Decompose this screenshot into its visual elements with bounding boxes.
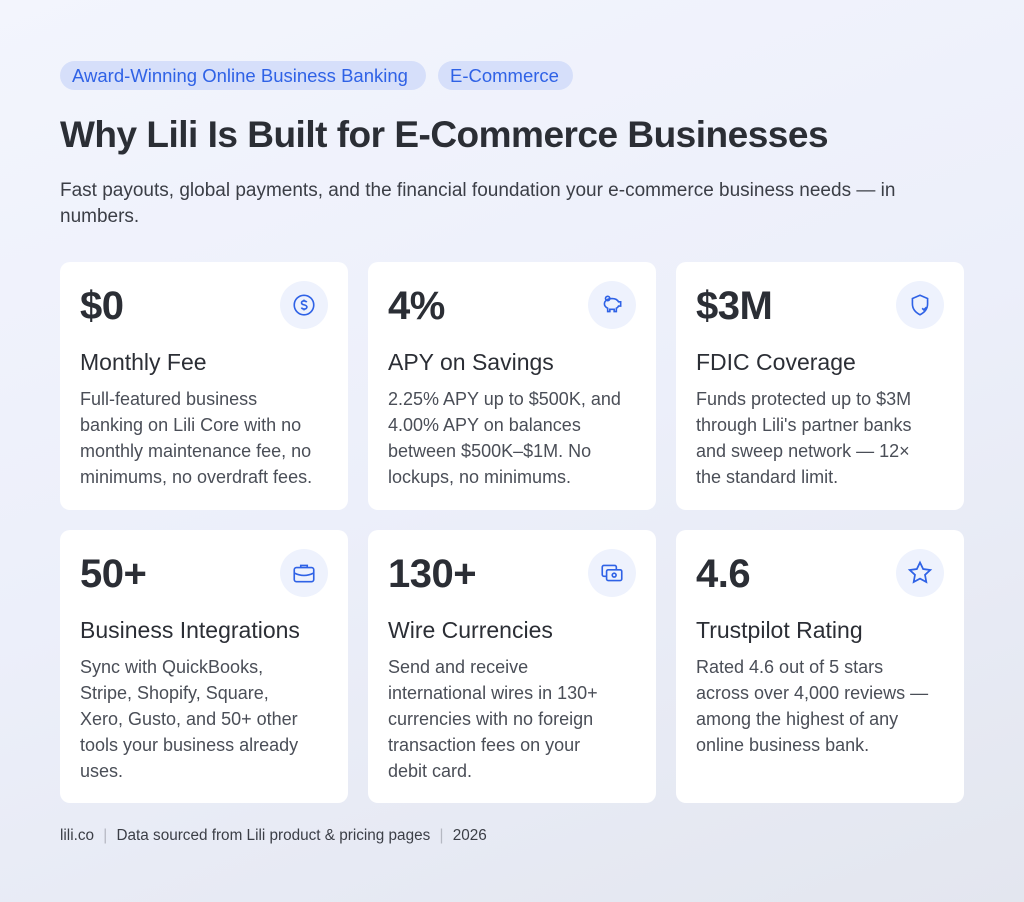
- card: FDIC: Funds protected up to $3M: [696, 389, 911, 409]
- card: currencies: 130+: [388, 552, 476, 596]
- card: FDIC: the standard limit.: [696, 467, 838, 487]
- pill: award: [60, 61, 426, 90]
- icon: briefcase: [280, 549, 328, 597]
- card: APY: [368, 262, 656, 510]
- icon: cash: [588, 549, 636, 597]
- card: APY: lockups, no minimums.: [388, 467, 571, 487]
- card: trustpilot: across over 4,000 reviews —: [696, 683, 928, 703]
- pill: award: Award-Winning Online Business Banking: [72, 65, 408, 86]
- card: integrations: [60, 530, 348, 803]
- card: currencies: [368, 530, 656, 803]
- subtitle: Fast payouts, global payments, and the financial foundation your e-commerce business needs — in: [60, 180, 895, 201]
- card: monthly fee: banking on Lili Core with no: [80, 415, 301, 435]
- card: integrations: uses.: [80, 761, 123, 781]
- pill: e-commerce: E-Commerce: [450, 65, 559, 86]
- card: FDIC: [676, 262, 964, 510]
- icon: piggy bank: [588, 281, 636, 329]
- card: monthly fee: Monthly Fee: [80, 349, 207, 375]
- card: FDIC: through Lili's partner banks: [696, 415, 912, 435]
- card: trustpilot: online business bank.: [696, 735, 869, 755]
- card: trustpilot: Rated 4.6 out of 5 stars: [696, 657, 883, 677]
- icon: dollar: [280, 281, 328, 329]
- card: APY: 2.25% APY up to $500K, and: [388, 389, 621, 409]
- footer: lili.co | Data sourced from Lili product & pricing pages | 2026: [60, 827, 487, 844]
- subtitle: [60, 180, 895, 227]
- icon: shield: [896, 281, 944, 329]
- card: APY: 4.00% APY on balances: [388, 415, 581, 435]
- card: FDIC: FDIC Coverage: [696, 349, 856, 375]
- card: monthly fee: Full-featured business: [80, 389, 257, 409]
- card: trustpilot: Trustpilot Rating: [696, 617, 863, 643]
- card: APY: 4%: [388, 284, 445, 328]
- card: currencies: international wires in 130+: [388, 683, 598, 703]
- card: monthly fee: $0: [80, 284, 124, 328]
- card: monthly fee: [60, 262, 348, 510]
- card: APY: between $500K–$1M. No: [388, 441, 591, 461]
- subtitle: numbers.: [60, 206, 139, 227]
- card: FDIC: and sweep network — 12×: [696, 441, 910, 461]
- card: APY: APY on Savings: [388, 349, 554, 375]
- pill: e-commerce: [438, 61, 573, 90]
- card: integrations: tools your business already: [80, 735, 298, 755]
- card: FDIC: $3M: [696, 284, 772, 328]
- title: Why Lili Is Built for E-Commerce Businesses: [60, 114, 828, 155]
- card: monthly fee: minimums, no overdraft fees.: [80, 467, 312, 487]
- card: trustpilot: 4.6: [696, 552, 750, 596]
- card: trustpilot: [676, 530, 964, 803]
- card: integrations: Xero, Gusto, and 50+ other: [80, 709, 298, 729]
- card: trustpilot: among the highest of any: [696, 709, 898, 729]
- card: integrations: Business Integrations: [80, 617, 300, 643]
- card: monthly fee: monthly maintenance fee, no: [80, 441, 311, 461]
- card: integrations: 50+: [80, 552, 146, 596]
- icon: star: [896, 549, 944, 597]
- card: currencies: Send and receive: [388, 657, 528, 677]
- card: currencies: debit card.: [388, 761, 472, 781]
- card: integrations: Stripe, Shopify, Square,: [80, 683, 269, 703]
- card: currencies: Wire Currencies: [388, 617, 553, 643]
- card: currencies: transaction fees on your: [388, 735, 580, 755]
- card: integrations: Sync with QuickBooks,: [80, 657, 263, 677]
- card: currencies: currencies with no foreign: [388, 709, 593, 729]
